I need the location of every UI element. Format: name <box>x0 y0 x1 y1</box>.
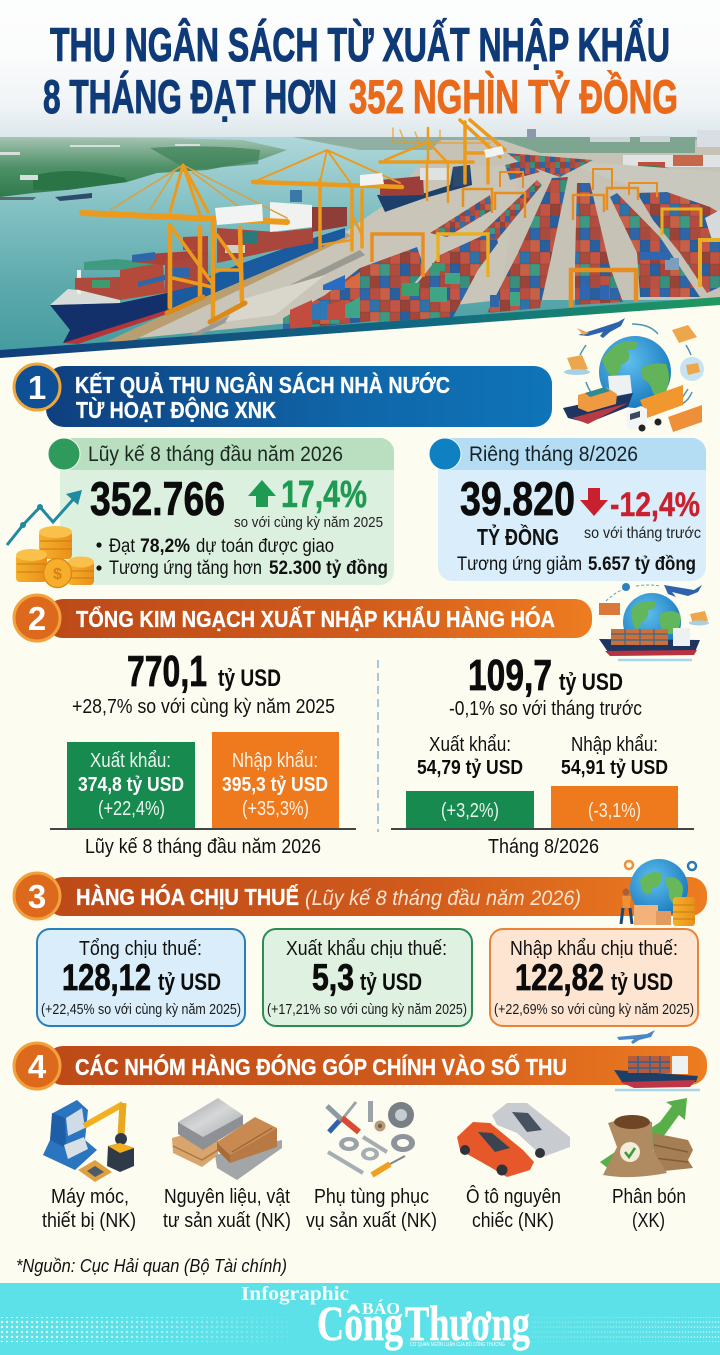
panel: cumulative 8 months: Đạt <box>109 536 136 557</box>
labels: contributing goods groups: vụ sản xuất (NK) <box>306 1210 437 1232</box>
icon: machinery <box>43 1100 134 1182</box>
second ship <box>377 165 472 212</box>
stat: total trade value: tỷ USD <box>218 665 281 692</box>
card: total taxable: 128,12 <box>62 957 151 998</box>
panel: month 8 <box>429 438 706 581</box>
bar chart: cumulative export import: Xuất khẩu: <box>90 750 171 772</box>
decorative diagonal strip <box>0 297 720 358</box>
panel: cumulative 8 months: 52.300 tỷ đồng <box>269 558 388 579</box>
card: taxable exports: (+17,21% so với cùng kỳ năm 2025) <box>267 1002 467 1018</box>
card: total taxable: tỷ USD <box>158 969 221 996</box>
section 3 header: HÀNG HÓA CHỊU THUẾ <box>76 883 299 910</box>
far shore and industrial zone <box>293 129 720 300</box>
section 1 header: TỪ HOẠT ĐỘNG XNK <box>76 396 276 423</box>
card: taxable imports: Nhập khẩu chịu thuế: <box>510 938 678 960</box>
card: taxable exports: 5,3 <box>312 957 354 998</box>
icon: raw materials <box>172 1098 282 1180</box>
bar chart: cumulative export import: (+35,3%) <box>242 798 309 820</box>
section 1 header: 1 <box>28 369 46 406</box>
icon: plane and cargo ship <box>614 1030 700 1090</box>
stat: month 8 trade value: tỷ USD <box>559 669 623 696</box>
card: taxable exports: tỷ USD <box>360 969 422 996</box>
bar chart: month 8 export import: (+3,2%) <box>441 800 499 822</box>
panel: cumulative 8 months: 352.766 <box>90 472 225 525</box>
panel: cumulative 8 months: 78,2% <box>140 536 190 557</box>
port photo illustration <box>0 0 720 357</box>
labels: contributing goods groups: (XK) <box>632 1210 665 1232</box>
footer banner: BÁO <box>362 1299 400 1318</box>
panel: cumulative 8 months: dự toán được giao <box>196 536 334 557</box>
panel: cumulative 8 months: Lũy kế 8 tháng đầu năm 2026 <box>88 443 343 466</box>
labels: contributing goods groups: Phụ tùng phục <box>314 1186 429 1208</box>
section 4 header: 4 <box>28 1048 47 1085</box>
panel: month 8: 39.820 <box>460 472 575 525</box>
panel: cumulative 8 months: 17,4% <box>281 474 367 516</box>
labels: contributing goods groups: chiếc (NK) <box>472 1210 554 1232</box>
stat: total trade value: 770,1 <box>127 647 207 696</box>
panel: month 8: Riêng tháng 8/2026 <box>469 443 638 466</box>
card: total taxable: Tổng chịu thuế: <box>79 938 202 960</box>
bar chart: cumulative export import: Nhập khẩu: <box>232 750 318 772</box>
bar chart: month 8 export import: Nhập khẩu: <box>571 734 658 756</box>
bar chart: month 8 export import: 54,79 tỷ USD <box>417 757 523 779</box>
bar chart: cumulative export import <box>50 732 356 858</box>
card: total taxable: (+22,45% so với cùng kỳ năm 2025) <box>41 1002 241 1018</box>
icon: globe with boxes and coins <box>621 859 696 926</box>
yard gantries <box>372 169 720 307</box>
bar chart: month 8 export import: (-3,1%) <box>588 800 641 822</box>
ship-to-shore cranes <box>82 120 505 322</box>
bar chart: cumulative export import: 374,8 tỷ USD <box>78 774 184 796</box>
labels: contributing goods groups: Ô tô nguyên <box>466 1185 561 1208</box>
icon: trend arrow and coins: $ <box>53 566 62 583</box>
panel: month 8: TỶ ĐỒNG <box>477 522 559 550</box>
bar chart: month 8 export import <box>391 734 694 858</box>
footer banner <box>0 1283 720 1355</box>
card: total taxable <box>37 929 245 1026</box>
stat: month 8 trade value: -0,1% so với tháng trước <box>449 698 642 720</box>
panel: cumulative 8 months <box>48 438 394 585</box>
container yard blocks <box>283 153 720 330</box>
panel: cumulative 8 months: so với cùng kỳ năm 2025 <box>234 514 383 531</box>
footer banner: Infographic <box>241 1283 349 1305</box>
section 4 header <box>14 1043 707 1089</box>
card: taxable imports: 122,82 <box>515 957 604 998</box>
bar chart: month 8 export import: Xuất khẩu: <box>429 734 511 756</box>
section 2 header: 2 <box>28 600 46 637</box>
bar chart: cumulative export import: 395,3 tỷ USD <box>222 774 328 796</box>
section 1 header <box>14 364 552 427</box>
front container ship <box>50 190 347 344</box>
footer banner: Công <box>317 1295 403 1351</box>
footer banner: CƠ QUAN NGÔN LUẬN CỦA BỘ CÔNG THƯƠNG <box>410 1341 505 1348</box>
section 1 header: KẾT QUẢ THU NGÂN SÁCH NHÀ NƯỚC <box>75 370 450 398</box>
stat: month 8 trade value: 109,7 <box>468 651 552 700</box>
panel: month 8: 5.657 tỷ đồng <box>588 554 696 575</box>
card: taxable imports: tỷ USD <box>611 969 673 996</box>
icon: tools and spare parts <box>327 1101 415 1175</box>
card: taxable exports: Xuất khẩu chịu thuế: <box>286 938 447 960</box>
labels: contributing goods groups: tư sản xuất (NK) <box>163 1210 291 1232</box>
bar chart: cumulative export import: (+22,4%) <box>98 798 165 820</box>
source note: *Nguồn: Cục Hải quan (Bộ Tài chính) <box>16 1256 287 1276</box>
icon: globe with plane, ship and truck <box>563 318 704 432</box>
card: taxable imports <box>490 929 698 1026</box>
bar chart: month 8 export import: Tháng 8/2026 <box>488 836 599 858</box>
labels: contributing goods groups: Nguyên liệu, vật <box>164 1186 290 1208</box>
icon: trend arrow and coins <box>7 490 94 588</box>
stat: total trade value <box>72 647 335 718</box>
labels: contributing goods groups <box>42 1185 686 1232</box>
card: taxable exports <box>263 929 472 1026</box>
section 3 header <box>14 873 707 919</box>
section 4 header: CÁC NHÓM HÀNG ĐÓNG GÓP CHÍNH VÀO SỐ THU <box>75 1053 567 1080</box>
stat: month 8 trade value <box>449 651 642 720</box>
panel: month 8: Tương ứng giảm <box>457 554 582 575</box>
icon: cars <box>457 1103 570 1177</box>
bar chart: cumulative export import: Lũy kế 8 tháng đầu năm 2026 <box>85 836 321 858</box>
icon: fertilizer sack and arrow <box>600 1098 693 1177</box>
panel: cumulative 8 months: Tương ứng tăng hơn <box>109 558 262 579</box>
title: 8 THÁNG ĐẠT HƠN <box>43 70 337 123</box>
panel: month 8: -12,4% <box>610 486 700 524</box>
section 2 header <box>14 595 592 641</box>
footer banner: Thương <box>405 1295 530 1351</box>
labels: contributing goods groups: thiết bị (NK) <box>42 1210 136 1232</box>
labels: contributing goods groups: Máy móc, <box>51 1186 129 1208</box>
labels: contributing goods groups: Phân bón <box>612 1186 686 1208</box>
section 3 header: (Lũy kế 8 tháng đầu năm 2026) <box>305 887 581 910</box>
section 2 header: TỔNG KIM NGẠCH XUẤT NHẬP KHẨU HÀNG HÓA <box>76 605 555 632</box>
title <box>43 18 678 123</box>
stat: total trade value: +28,7% so với cùng kỳ năm 2025 <box>72 696 335 718</box>
section 3 header: 3 <box>28 878 46 915</box>
quay apron <box>108 206 490 341</box>
bar chart: month 8 export import: 54,91 tỷ USD <box>561 757 668 779</box>
icon: globe and cargo ship <box>599 583 709 660</box>
panel: month 8: so với tháng trước <box>584 525 701 542</box>
near land <box>0 137 287 197</box>
